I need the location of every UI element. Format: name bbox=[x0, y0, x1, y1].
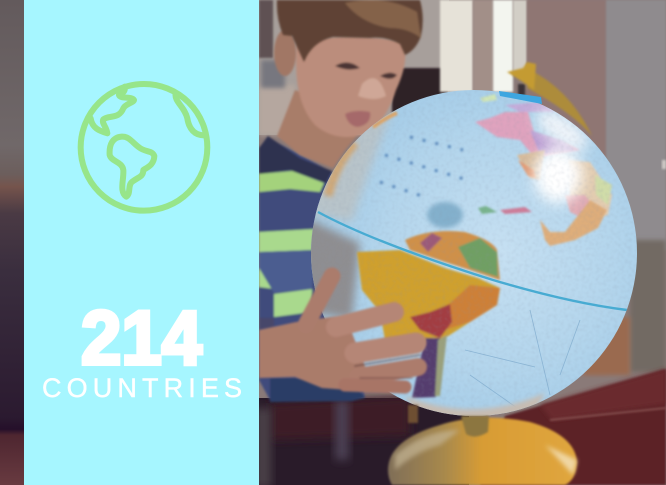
photo background: room bbox=[259, 0, 666, 485]
icon: green globe bbox=[81, 84, 207, 211]
photo: boy with a globe bbox=[255, 0, 666, 485]
globe: lower shadow bbox=[405, 392, 545, 416]
globe stem and base bbox=[388, 405, 577, 485]
globe: grey left shade bbox=[315, 111, 394, 224]
globe bbox=[300, 90, 637, 420]
globe: fine map texture bbox=[362, 98, 622, 386]
globe: ocean detail bbox=[427, 202, 463, 228]
boy: neck and face bbox=[274, 30, 405, 168]
label: COUNTRIES: COUNTRIES bbox=[42, 373, 242, 403]
globe arm bbox=[507, 62, 592, 136]
globe: South Pacific detail bbox=[465, 310, 580, 410]
boy: hair bbox=[277, 0, 423, 62]
globe: South America bbox=[357, 250, 500, 398]
statistic: 214: 214 bbox=[81, 296, 202, 381]
boy: shirt and stripes bbox=[259, 136, 365, 402]
globe: Asia colours bbox=[475, 94, 612, 246]
hand on the globe bbox=[259, 276, 420, 392]
globe: glare bbox=[534, 147, 582, 203]
globe: printed ocean lettering bbox=[380, 137, 467, 198]
left panel bbox=[24, 0, 259, 485]
photo strip: blurred left edge bbox=[0, 0, 24, 485]
globe: meridian ring bbox=[318, 212, 627, 310]
globe: Central America bbox=[405, 231, 500, 280]
table top bbox=[255, 369, 666, 485]
